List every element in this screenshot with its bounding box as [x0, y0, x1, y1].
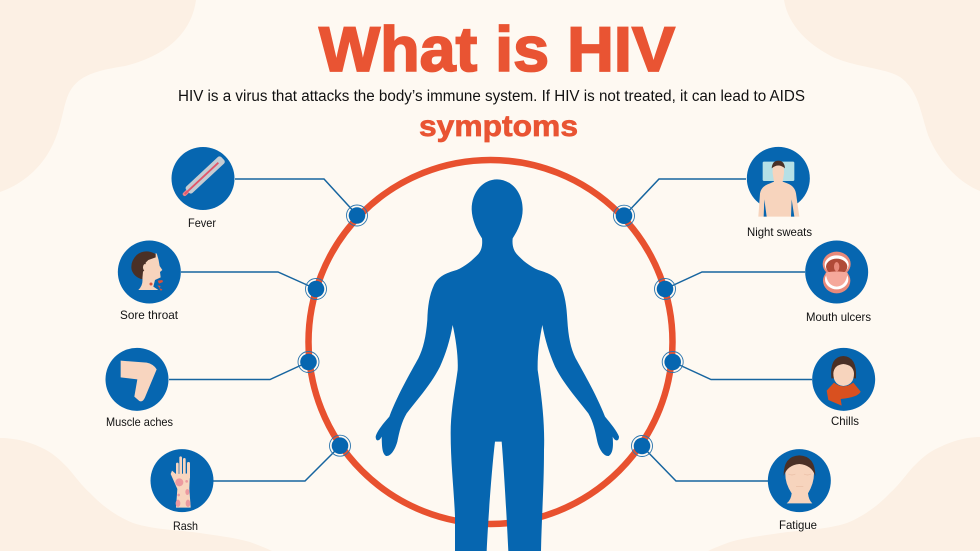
- icon: fatigue: [768, 449, 831, 512]
- connector lines: [169, 179, 812, 481]
- label: mouth ulcers: Mouth ulcers: [806, 310, 871, 324]
- symptoms heading: symptoms: [419, 110, 578, 143]
- icon: night sweats: [747, 147, 810, 217]
- subtitle: HIV is a virus that attacks the body’s immune system. If HIV is not treated, it can lead to AIDS: [178, 88, 805, 105]
- icon: fever thermometer: [172, 147, 234, 210]
- label: chills: Chills: [831, 414, 859, 428]
- label: rash: Rash: [173, 519, 198, 533]
- icon: sore throat: [118, 240, 181, 303]
- icon: muscle aches: [105, 348, 168, 411]
- ring nodes: [298, 205, 683, 456]
- label: fever: Fever: [188, 216, 216, 230]
- icon: chills: [812, 348, 875, 411]
- orange ring: [308, 160, 672, 524]
- icon: rash hand: [150, 449, 213, 512]
- icon: mouth ulcers: [805, 240, 868, 303]
- body silhouette: [376, 179, 619, 551]
- label: sore throat: Sore throat: [120, 308, 179, 322]
- label: muscle aches: Muscle aches: [106, 415, 173, 429]
- label: night sweats: Night sweats: [747, 225, 812, 239]
- label: fatigue: Fatigue: [779, 518, 817, 532]
- title: What is HIV: [319, 15, 675, 85]
